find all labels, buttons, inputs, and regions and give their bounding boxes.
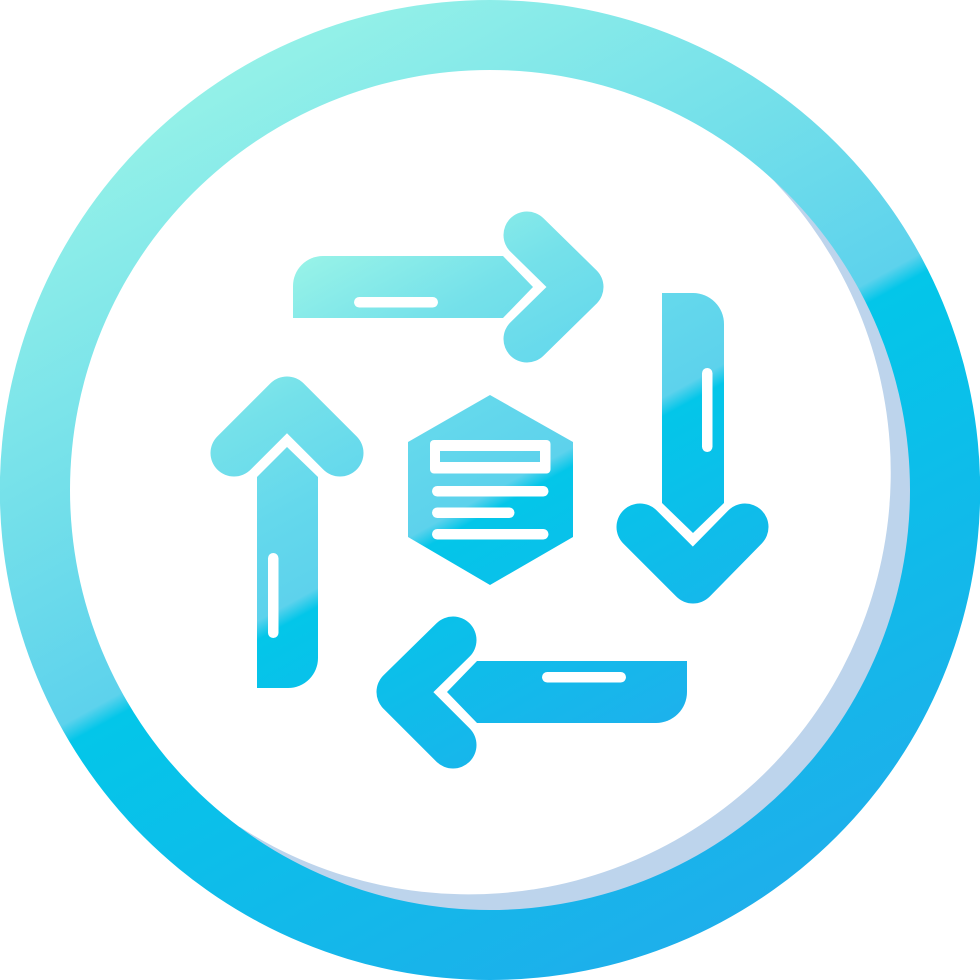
chevron head [234, 400, 340, 453]
header frame [430, 440, 550, 474]
slot [268, 553, 278, 638]
arrow: left (bottom) [400, 640, 687, 745]
text line 2 [432, 508, 514, 518]
chevron head [640, 527, 745, 580]
slot [354, 297, 438, 308]
arrow body [257, 447, 318, 688]
header inner [440, 451, 540, 462]
arrow: up (left) [234, 400, 340, 688]
arrow body [662, 293, 724, 533]
arrow body [447, 661, 687, 723]
slot [542, 672, 626, 682]
slot [702, 368, 712, 452]
arrow: right (top) [293, 235, 580, 339]
chevron head [400, 640, 453, 745]
arrow: down (right) [640, 293, 745, 580]
hexagon [408, 395, 573, 585]
text line 3 [432, 529, 548, 540]
arrow body [293, 256, 533, 318]
chevron head [527, 235, 580, 339]
center hexagon document [408, 395, 573, 585]
text line 1 [432, 486, 548, 496]
crescent shadow [66, 66, 914, 914]
